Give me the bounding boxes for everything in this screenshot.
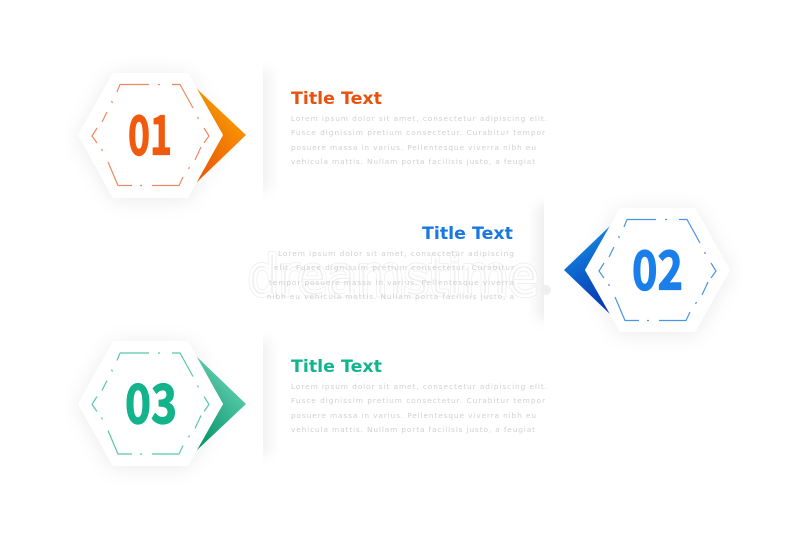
body text 03: vehicula mattis. Nullam porta facilisis justo, a feugiat — [291, 425, 535, 434]
body text 03: Fusce dignissim pretium consectetur. Curabitur tempor — [291, 396, 546, 405]
number 01: 01 — [128, 92, 172, 170]
dashed hexagon 02 — [599, 220, 716, 320]
panel: step 03 — [78, 340, 547, 466]
title 03: Title Text — [291, 357, 382, 376]
body text 01 — [291, 114, 547, 166]
icon: arrow 03 — [195, 356, 246, 452]
body text 03 — [291, 382, 547, 434]
body text 02: Lorem ipsum dolor sit amet, consectetur adipiscing — [278, 249, 514, 258]
panel: step 01 — [78, 70, 547, 198]
divider shadow 03 — [263, 340, 279, 455]
body text 02 — [267, 249, 515, 301]
divider shadow 02 — [528, 205, 544, 320]
body text 03: posuere massa in varius. Pellentesque viverra nibh eu — [291, 411, 536, 420]
icon: arrow 01 — [195, 88, 246, 184]
dashed hexagon 03 — [92, 353, 209, 454]
icon: hexagon 03 — [78, 341, 223, 466]
body text 01: Fusce dignissim pretium consectetur. Curabitur tempor — [291, 128, 546, 137]
title 01: Title Text — [291, 89, 382, 108]
body text 03: Lorem ipsum dolor sit amet, consectetur adipiscing elit. — [291, 382, 547, 391]
body text 01: Lorem ipsum dolor sit amet, consectetur adipiscing elit. — [291, 114, 547, 123]
watermark: dreamstime — [248, 245, 538, 308]
icon: arrow 02 — [564, 225, 611, 315]
divider shadow 01 — [263, 70, 279, 190]
body text 01: posuere massa in varius. Pellentesque viverra nibh eu — [291, 143, 536, 152]
icon: hexagon 01 — [78, 73, 223, 198]
number 02: 02 — [632, 226, 683, 306]
body text 02: elit. Fusce dignissim pretium consectetur. Curabitur — [274, 263, 515, 272]
title 02: Title Text — [422, 224, 513, 243]
icon: hexagon 02 — [585, 208, 730, 332]
watermark: dreamstime — [248, 245, 538, 308]
number 03: 03 — [125, 360, 177, 439]
dashed hexagon 01 — [92, 84, 209, 186]
body text 02: nibh eu vehicula mattis. Nullam porta facilisis justo, a — [267, 292, 514, 301]
panel: step 02 — [248, 205, 730, 332]
body text 02: tempor posuere massa in varius. Pellentesque viverra — [269, 278, 514, 287]
body text 01: vehicula mattis. Nullam porta facilisis justo, a feugiat — [291, 157, 535, 166]
